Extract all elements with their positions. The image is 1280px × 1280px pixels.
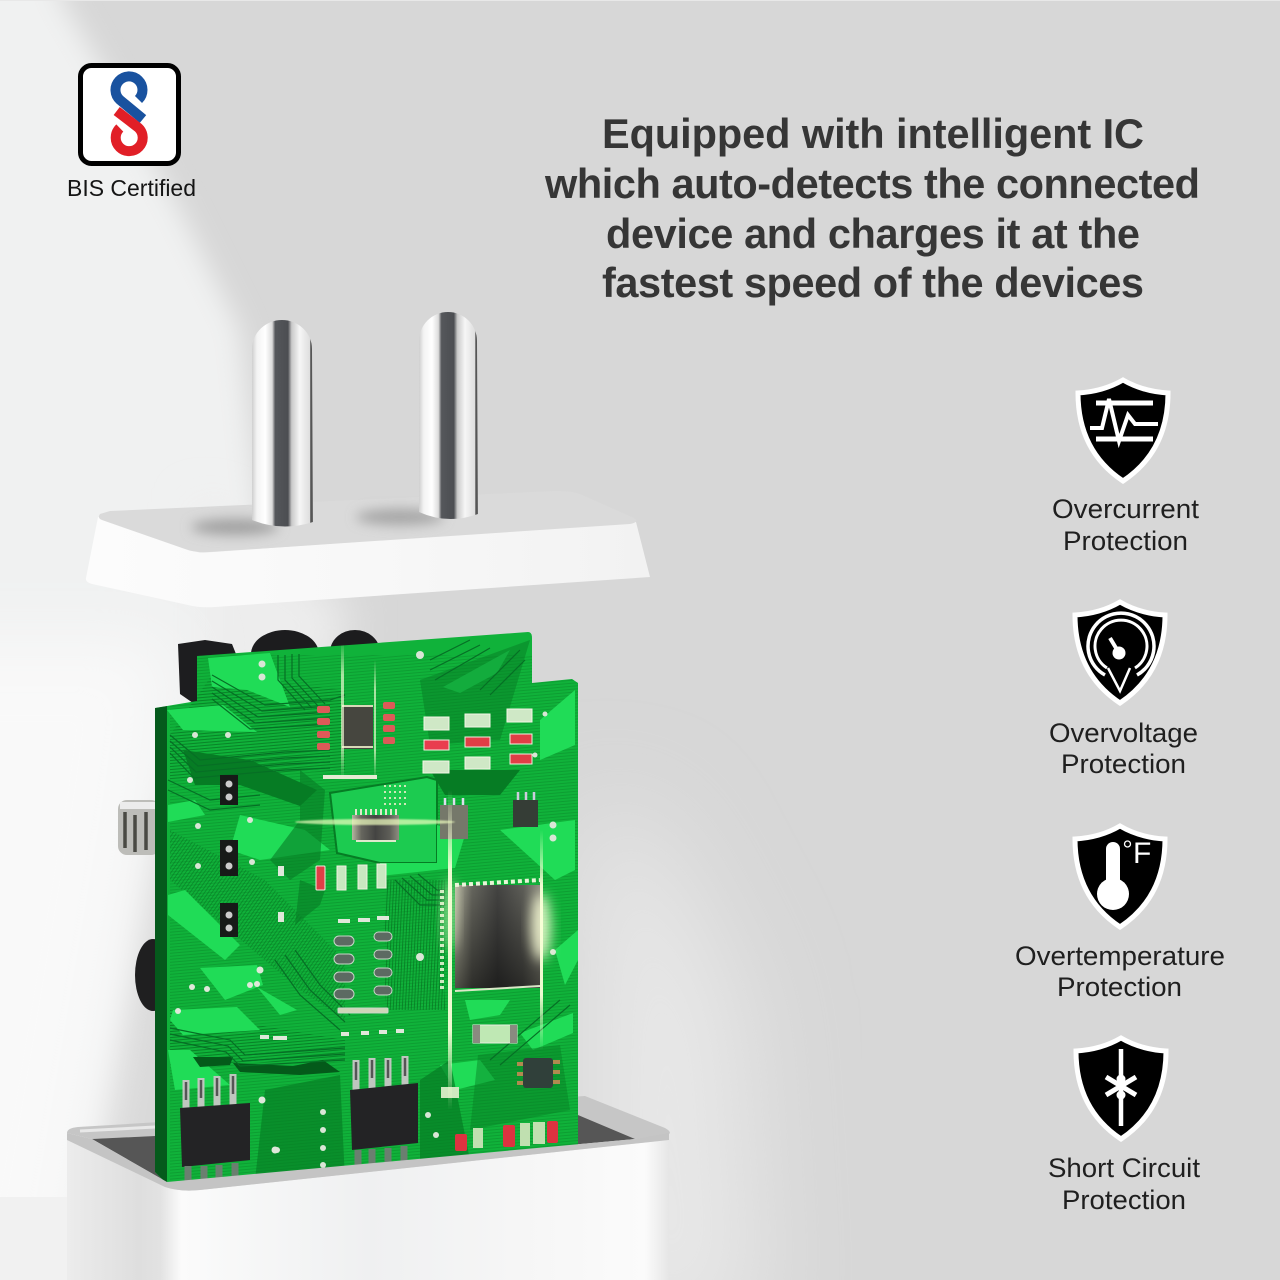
icon: short circuit shield [1076,1038,1166,1139]
BIS certified badge [67,66,196,201]
silver capacitor [118,800,160,855]
right pin [419,312,478,519]
upper chip with resistors [317,702,395,779]
bottom-center power chip [350,1056,418,1175]
icon: overcurrent shield [1078,380,1168,481]
BIS label: BIS Certified [67,175,196,201]
bottom red and green SMDs [441,1087,558,1151]
pin shadows [191,509,444,535]
feature: short circuit protection [1048,1038,1201,1215]
central light patch [330,777,437,863]
vertical resistors row [316,864,386,890]
bright green planes [167,650,578,1090]
overtemperature label [1015,941,1225,1002]
short circuit label: Protection [1062,1185,1186,1215]
central IC [352,786,408,841]
trace bundles [168,640,570,1066]
light SMD resistor [473,1025,517,1043]
feature: overvoltage protection [1049,602,1198,779]
right small chips [440,792,560,1088]
overtemperature label: Protection [1057,972,1182,1002]
left pin [252,320,313,527]
overvoltage label: Protection [1061,749,1186,779]
icon: overvoltage shield [1075,602,1165,703]
overcurrent label: Overcurrent [1052,494,1200,524]
plate front face [86,517,650,607]
plug head [86,312,650,607]
overtemperature label: Overtemperature [1015,941,1225,971]
heading: device and charges it at the [606,210,1140,257]
main processor [442,880,540,991]
charger body [67,1133,669,1280]
SMD component rows [423,709,532,773]
plate top face [99,491,636,552]
fine trace texture [170,655,580,1185]
circuit board [150,625,585,1190]
left black sockets [220,775,238,937]
dark copper areas [155,640,570,1184]
parts behind the circuit board [118,630,380,1011]
heading: which auto-detects the connected [544,160,1200,207]
overcurrent label: Protection [1063,526,1188,556]
icon: overtemperature shield: F [1133,837,1151,870]
overcurrent label [1052,494,1200,556]
short circuit label: Short Circuit [1048,1153,1201,1183]
short circuit label [1048,1153,1201,1215]
overvoltage label: Overvoltage [1049,718,1198,748]
feature: overtemperature protection [1015,826,1225,1002]
heading: Equipped with intelligent IC [602,110,1144,157]
BIS logo mark [80,66,178,164]
feature: overcurrent protection [1052,380,1200,556]
heading: fastest speed of the devices [602,259,1144,306]
bottom-left power chip [180,1074,250,1190]
heading [544,110,1200,306]
overvoltage label [1049,718,1198,779]
green glow lines [295,640,551,1110]
icon: overtemperature shield [1075,826,1165,927]
oval capacitors [334,932,392,1013]
charger rim and cavity [67,1096,670,1182]
via dots [187,651,556,1168]
small white pads [175,866,404,1154]
